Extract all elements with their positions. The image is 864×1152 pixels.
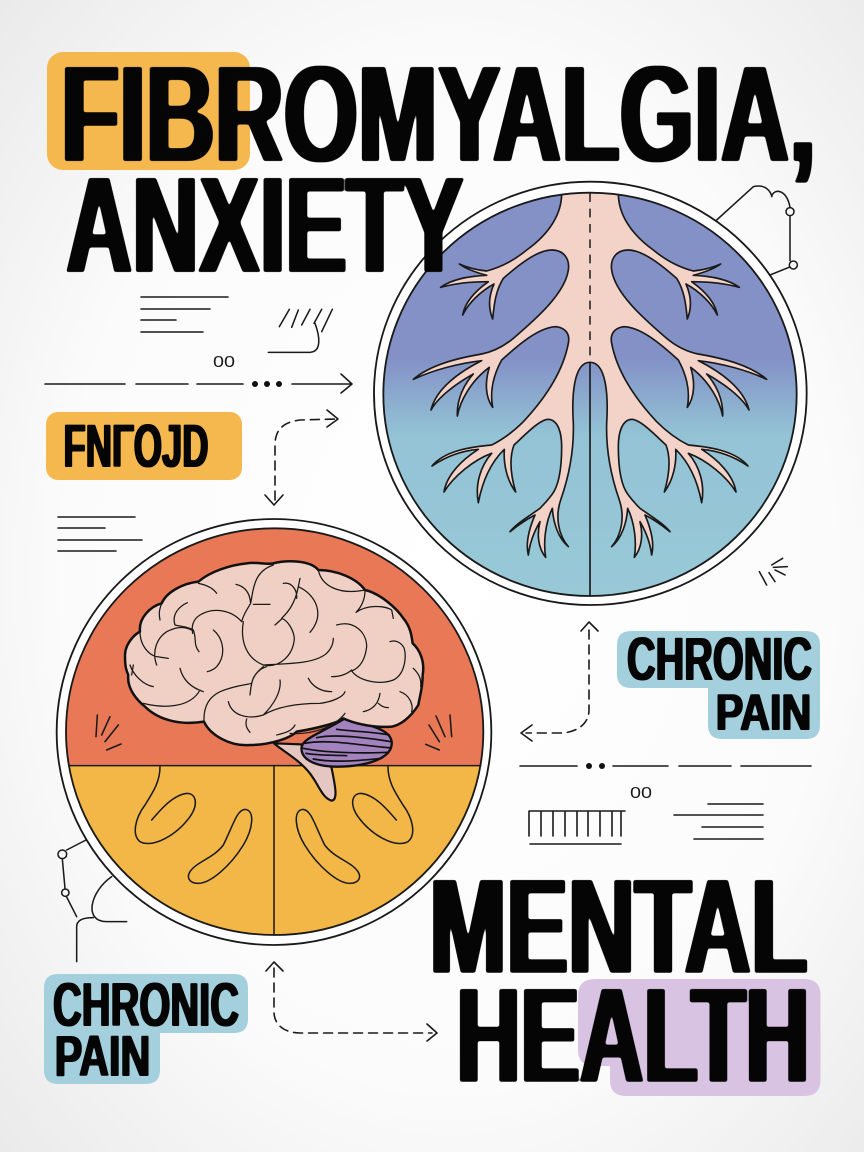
title: anxiety: ANXIETY [66,147,464,303]
arrow: dashed bottom [266,962,437,1041]
heading highlight: mental health [578,979,820,1096]
label: chronic pain right: PAIN [716,684,811,742]
small numerals: 00 [213,354,235,371]
icon: sparks lower right [759,558,787,585]
small numerals right: 00 [630,785,652,802]
panel: brain circle [56,518,492,946]
label: chronic pain left: PAIN [55,1024,150,1089]
label: chronic pain left [44,970,248,1089]
arrow: dashed curved up and left [521,622,598,741]
text lines: mid left [58,517,142,551]
label: chronic pain left: CHRONIC [53,970,239,1040]
text lines: lower right [674,804,763,839]
arrow: lower dotted line [520,763,811,769]
label: chronic pain right [617,625,820,742]
icon: circuit lower left [58,840,127,962]
arrow: dashed curved down and right [265,410,338,505]
arrow: top dotted timeline [45,374,352,393]
brain stem [274,743,336,801]
cerebellum [302,718,392,767]
label: yellow tag [46,412,242,480]
icon: circuit top right [717,186,797,275]
text lines: top left [141,297,228,332]
brain [125,561,423,745]
panel: lung / nerve tree circle [374,182,807,605]
label: yellow tag: FNΓOJD [64,412,208,480]
icon: sketch hand [268,309,332,352]
title highlight [47,52,250,170]
icon: comb scale [529,811,625,844]
